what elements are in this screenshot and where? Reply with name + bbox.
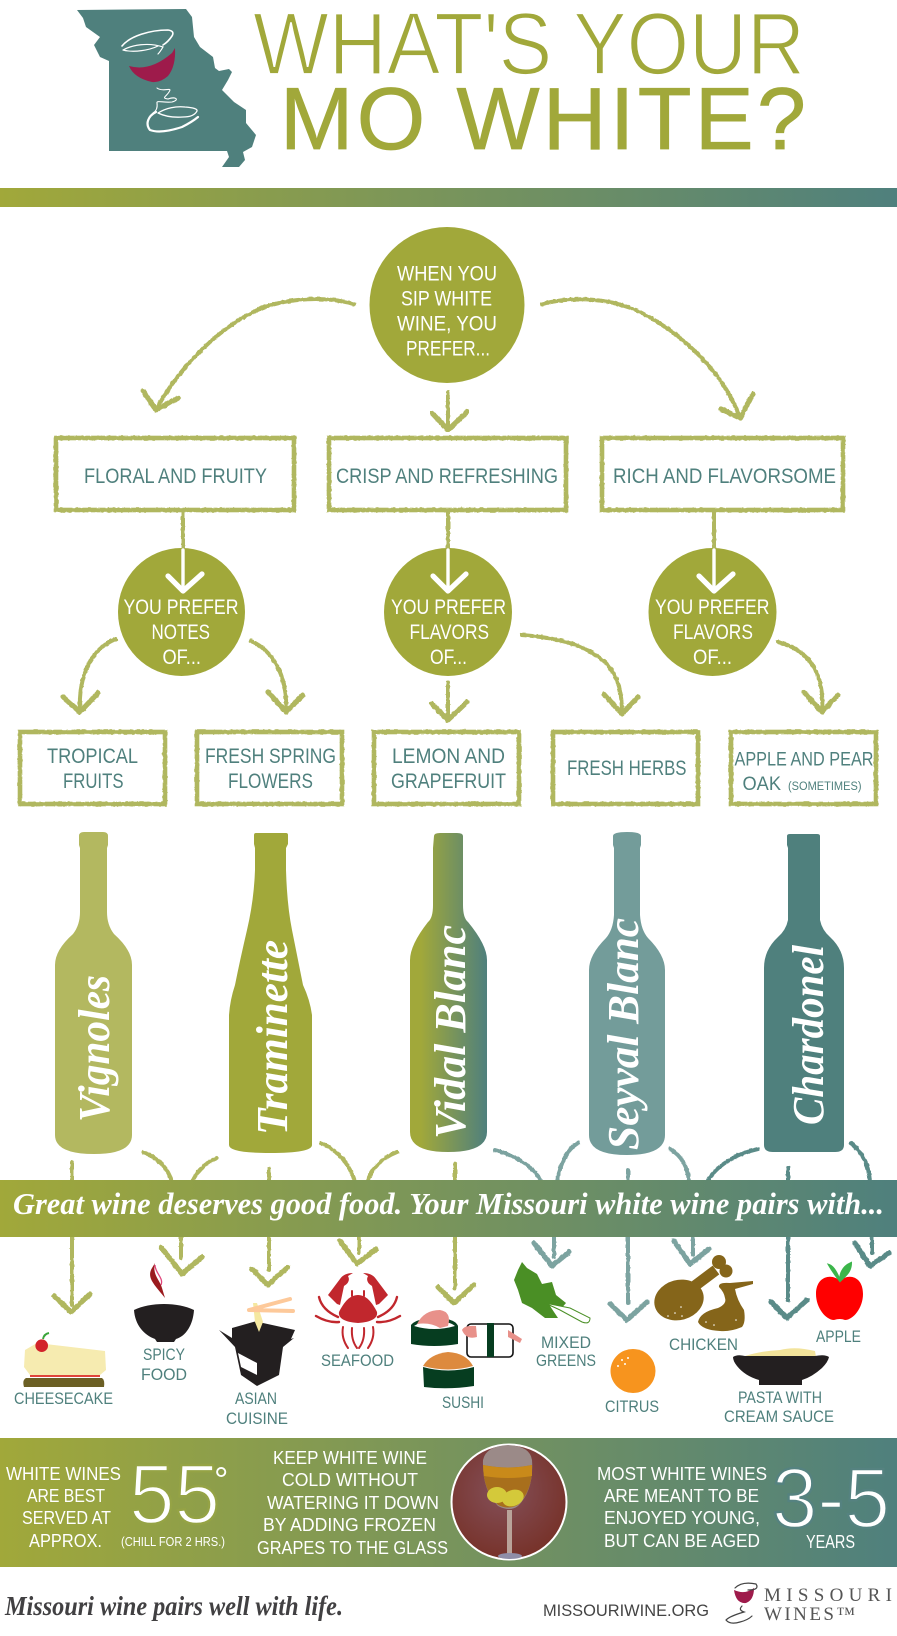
photo: wine glass with frozen grapes	[452, 1444, 566, 1560]
box: fresh herbs	[553, 732, 698, 804]
food: seafood crab: SEAFOOD	[321, 1352, 394, 1370]
bottle: Vidal Blanc	[410, 833, 487, 1152]
circle: you prefer notes of: NOTES	[152, 621, 210, 644]
bottle: Seyval Blanc: Seyval Blanc	[599, 918, 648, 1150]
box: apple and pear, oak	[731, 732, 876, 804]
icon: Missouri map with wine glass	[77, 9, 256, 167]
header gradient bar	[0, 188, 897, 207]
question circle: WINE, YOU	[397, 312, 497, 336]
box: rich and flavorsome	[602, 438, 843, 510]
box: lemon and grapefruit	[374, 732, 519, 804]
fact: frozen grapes: GRAPES TO THE GLASS	[257, 1538, 448, 1558]
bottle: Vignoles	[55, 832, 132, 1154]
fact: aging: ARE MEANT TO BE	[604, 1486, 759, 1506]
food: sushi	[411, 1310, 522, 1412]
footer website: MISSOURIWINE.ORG	[543, 1601, 709, 1620]
fact: frozen grapes: BY ADDING FROZEN	[263, 1515, 436, 1535]
food: pasta with cream sauce	[724, 1348, 834, 1426]
question circle	[370, 227, 524, 383]
fact: frozen grapes: KEEP WHITE WINE	[273, 1448, 427, 1468]
box: apple and pear, oak: (SOMETIMES)	[788, 781, 862, 793]
fact: frozen grapes: WATERING IT DOWN	[267, 1493, 439, 1513]
footer logo: Missouri Wines: WINES™	[764, 1604, 855, 1625]
question circle: PREFER...	[406, 338, 490, 360]
food: citrus: CITRUS	[605, 1398, 659, 1416]
title: MO WHITE?	[280, 69, 806, 168]
fact: aging	[597, 1451, 890, 1552]
arrows: circles to flavor boxes	[63, 635, 838, 720]
box: tropical fruits	[20, 732, 165, 804]
box: fresh spring flowers: FLOWERS	[228, 770, 313, 793]
food: citrus	[605, 1349, 659, 1416]
footer tagline: Missouri wine pairs well with life.	[4, 1591, 343, 1621]
food: sushi: SUSHI	[442, 1394, 484, 1412]
question circle: SIP WHITE	[401, 288, 492, 310]
food: pasta with cream sauce: CREAM SAUCE	[724, 1408, 834, 1426]
food: spicy food	[134, 1263, 194, 1384]
circle: you prefer flavors of (rich)	[648, 548, 776, 676]
fact: serving temperature: 55	[129, 1447, 220, 1541]
arrow: question to rich and flavorsome	[542, 299, 753, 418]
food: asian cuisine: ASIAN	[235, 1390, 277, 1408]
fact: serving temperature: °	[214, 1459, 228, 1500]
fact: serving temperature: APPROX.	[29, 1531, 102, 1551]
fact: serving temperature: SERVED AT	[22, 1508, 111, 1528]
box: floral and fruity	[56, 438, 294, 510]
box: lemon and grapefruit: LEMON AND	[392, 745, 505, 768]
food: asian cuisine: CUISINE	[226, 1410, 288, 1428]
food: mixed greens: MIXED	[541, 1334, 591, 1352]
fact: aging: MOST WHITE WINES	[597, 1464, 767, 1484]
food: pasta with cream sauce: PASTA WITH	[738, 1389, 822, 1407]
box: fresh spring flowers: FRESH SPRING	[205, 745, 336, 768]
arrow: question to crisp and refreshing	[432, 392, 467, 430]
connector lines: preference boxes to circles	[183, 512, 714, 552]
circle: you prefer flavors of (crisp): OF...	[430, 646, 467, 669]
circle: you prefer notes of	[118, 548, 245, 676]
fact: serving temperature: WHITE WINES	[6, 1464, 121, 1484]
fact: aging: BUT CAN BE AGED	[604, 1531, 760, 1551]
food: mixed greens: GREENS	[536, 1352, 596, 1370]
circle: you prefer notes of: OF...	[162, 646, 201, 669]
bottle: Seyval Blanc	[589, 832, 665, 1155]
food banner: Great wine deserves good food. Your Missouri white wine pairs with...	[13, 1186, 884, 1221]
fact: serving temperature: ARE BEST	[27, 1486, 105, 1506]
bottle: Traminette	[229, 833, 312, 1153]
food: apple: APPLE	[816, 1328, 861, 1346]
food: seafood crab	[316, 1273, 400, 1370]
footer logo: Missouri Wines: MISSOURI	[764, 1585, 892, 1606]
box: fresh spring flowers	[197, 732, 342, 804]
box: lemon and grapefruit: GRAPEFRUIT	[391, 770, 506, 793]
food: chicken: CHICKEN	[669, 1336, 738, 1354]
facts banner	[0, 1438, 897, 1567]
box: tropical fruits: FRUITS	[63, 770, 124, 793]
food: apple	[816, 1263, 863, 1346]
fact: serving temperature	[6, 1447, 228, 1551]
fact: aging: 3-5	[772, 1451, 890, 1545]
bottle: Vidal Blanc: Vidal Blanc	[426, 925, 475, 1139]
food: spicy food: FOOD	[141, 1366, 187, 1384]
box: floral and fruity: FLORAL AND FRUITY	[84, 465, 267, 488]
food arrows behind banner	[54, 1143, 889, 1320]
footer logo: Missouri Wines	[726, 1583, 892, 1625]
food: cheesecake: CHEESECAKE	[14, 1390, 113, 1408]
circle: you prefer flavors of (crisp)	[384, 548, 512, 676]
food: spicy food: SPICY	[143, 1346, 185, 1364]
circle: you prefer flavors of (crisp): FLAVORS	[410, 621, 489, 644]
circle: you prefer flavors of (rich): FLAVORS	[673, 621, 753, 644]
box: rich and flavorsome: RICH AND FLAVORSOME	[613, 465, 836, 488]
food: cheesecake	[14, 1333, 113, 1408]
box: apple and pear, oak: APPLE AND PEAR	[734, 750, 874, 770]
fact: aging: ENJOYED YOUNG,	[604, 1508, 760, 1528]
bottle: Chardonel: Chardonel	[784, 944, 833, 1125]
bottle: Traminette: Traminette	[248, 940, 297, 1135]
arrow: question to floral and fruity	[143, 299, 354, 410]
fact: frozen grapes: COLD WITHOUT	[282, 1470, 418, 1490]
box: fresh herbs: FRESH HERBS	[567, 757, 686, 780]
food banner	[0, 1180, 897, 1237]
box: apple and pear, oak: OAK	[742, 774, 781, 795]
circle: you prefer notes of: YOU PREFER	[124, 596, 238, 619]
box: crisp and refreshing: CRISP AND REFRESHING	[336, 465, 558, 488]
food: chicken	[650, 1255, 753, 1354]
food: mixed greens	[514, 1262, 596, 1370]
bottle: Vignoles: Vignoles	[70, 975, 119, 1122]
box: tropical fruits: TROPICAL	[47, 745, 138, 768]
question circle: WHEN YOU	[397, 262, 497, 286]
fact: aging: YEARS	[806, 1532, 855, 1552]
bottle: Chardonel	[764, 834, 844, 1152]
circle: you prefer flavors of (crisp): YOU PREFER	[391, 596, 506, 619]
box: crisp and refreshing	[329, 438, 566, 510]
food: asian cuisine	[219, 1299, 295, 1428]
fact: frozen grapes	[257, 1448, 448, 1558]
circle: you prefer flavors of (rich): OF...	[693, 646, 732, 669]
fact: serving temperature: (CHILL FOR 2 HRS.)	[121, 1535, 225, 1549]
title	[253, 0, 806, 168]
circle: you prefer flavors of (rich): YOU PREFER	[655, 596, 770, 619]
